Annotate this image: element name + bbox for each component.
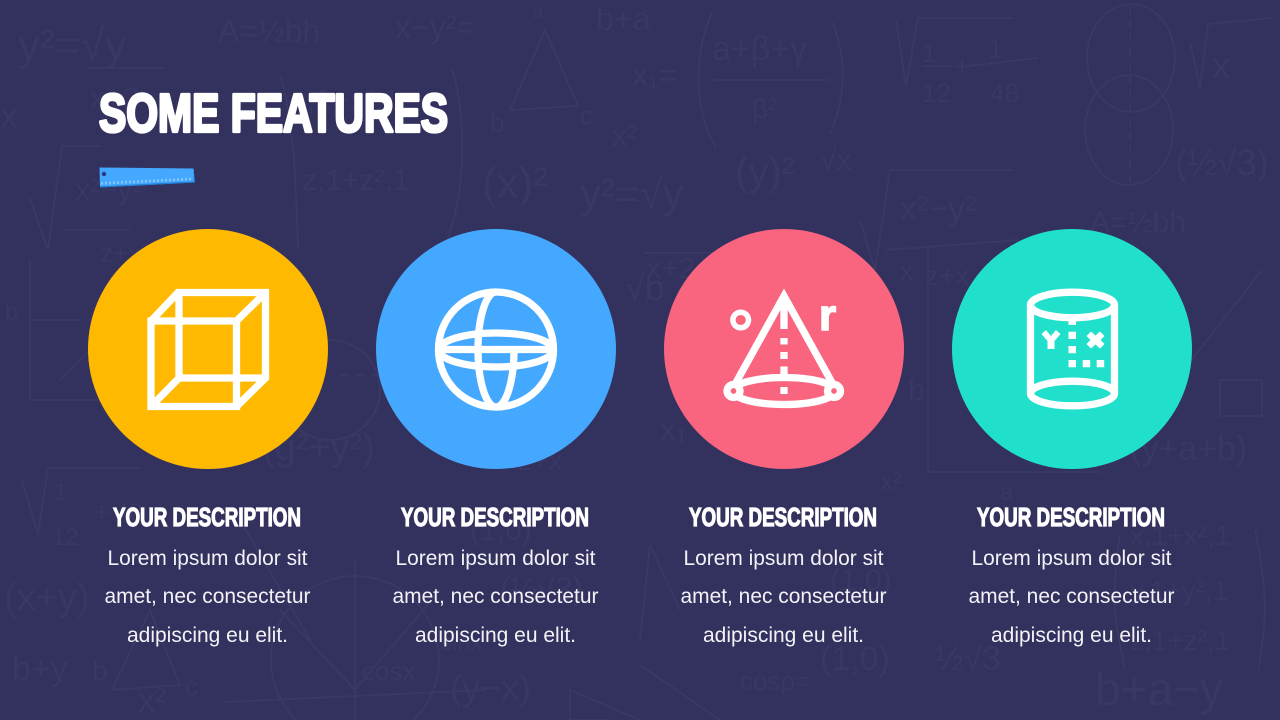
background pattern: math formulas: (x)²	[482, 159, 548, 208]
background pattern: math formulas: sinx	[440, 629, 483, 656]
background pattern: math formulas: b	[490, 108, 504, 138]
background pattern: math formulas: b+y	[12, 650, 68, 688]
faint geometry mid band	[30, 260, 180, 400]
background pattern: math formulas: y²=√y	[580, 170, 684, 217]
background pattern: math formulas: c	[580, 100, 593, 130]
background pattern: math formulas: c	[185, 671, 198, 701]
background pattern: math formulas: a+β+γ	[712, 30, 807, 68]
background pattern: math formulas: 1	[54, 479, 67, 506]
background pattern: math formulas: z,1+z²,1	[1130, 625, 1230, 656]
background pattern: math formulas: b	[92, 655, 108, 686]
description: amet, nec consectetur	[392, 585, 599, 608]
background pattern: math formulas: x+2	[90, 82, 139, 115]
background pattern: math formulas: b	[908, 374, 925, 407]
blue circle	[376, 229, 616, 469]
background pattern: math formulas: β²	[752, 93, 777, 124]
description: adipiscing eu elit.	[703, 624, 864, 647]
background pattern: math formulas: a	[532, 1, 544, 23]
background pattern: math formulas: cosρ=	[740, 666, 810, 696]
background pattern: math formulas: A=½bh	[1090, 206, 1186, 239]
background pattern: math formulas: 12	[922, 78, 951, 108]
background pattern: math formulas: (y−x)	[450, 667, 531, 708]
background pattern: math formulas: (1,0)	[820, 640, 890, 678]
description: adipiscing eu elit.	[991, 624, 1152, 647]
description: Lorem ipsum dolor sit	[396, 547, 596, 570]
description: Lorem ipsum dolor sit	[108, 547, 308, 570]
background pattern: math formulas: b+a−y	[1095, 663, 1223, 715]
heading: YOUR DESCRIPTION	[977, 504, 1165, 532]
ruler icon	[100, 168, 195, 188]
description	[968, 547, 1175, 647]
background pattern: math formulas: y²=√y	[18, 21, 126, 70]
background pattern: math formulas: z,1+z²,1	[302, 164, 410, 197]
description: amet, nec consectetur	[104, 585, 311, 608]
icon: cone: r	[819, 291, 836, 340]
background pattern: math formulas: y,1+y²,1	[1130, 575, 1228, 606]
background pattern: math formulas: 12	[52, 524, 79, 551]
background pattern: math formulas: (y+a+b)	[1130, 430, 1247, 468]
background pattern: math formulas: z+x	[925, 260, 969, 291]
background pattern: math formulas: (1,0)	[470, 514, 532, 547]
background pattern: math formulas: x	[0, 95, 18, 136]
background pattern: math formulas: (g²+y²)	[262, 427, 375, 469]
background pattern: math formulas: 48	[990, 78, 1019, 108]
background pattern: math formulas: +	[954, 51, 970, 82]
background pattern: math formulas: √b	[625, 267, 665, 308]
background pattern: math formulas: x₁	[660, 411, 687, 447]
background pattern: math formulas: √x	[820, 144, 851, 177]
teal circle	[952, 229, 1192, 469]
background pattern: math formulas: x²	[612, 120, 637, 153]
heading: YOUR DESCRIPTION	[113, 504, 301, 532]
description: Lorem ipsum dolor sit	[684, 547, 884, 570]
background pattern: math formulas: z+x	[100, 238, 141, 268]
background pattern: math formulas: cosx	[362, 656, 415, 686]
feature 3: cone	[664, 229, 904, 647]
background pattern: math formulas: x+2	[646, 252, 695, 285]
coral circle	[664, 229, 904, 469]
background pattern: math formulas: (½√3)	[500, 571, 583, 607]
description	[104, 547, 311, 647]
icon: cylinder	[1030, 292, 1114, 406]
description: amet, nec consectetur	[968, 585, 1175, 608]
background pattern: math formulas: b	[5, 299, 18, 326]
background pattern: math formulas: x−y²=	[395, 9, 475, 45]
background pattern: math formulas: x₁=	[632, 57, 677, 93]
background pattern: math formulas: a	[1000, 479, 1014, 506]
feature 2: sphere	[376, 229, 616, 647]
icon: wireframe cube	[151, 292, 266, 406]
icon: globe	[438, 292, 554, 407]
description: amet, nec consectetur	[680, 585, 887, 608]
background pattern: math formulas: x	[900, 256, 913, 286]
background pattern: math formulas: x²	[880, 466, 902, 496]
description	[680, 547, 887, 647]
background pattern: math formulas: (x+y)	[4, 577, 90, 619]
description: adipiscing eu elit.	[127, 624, 288, 647]
background pattern: math formulas: 1	[922, 38, 936, 68]
background pattern: math formulas: x²−y²	[900, 190, 976, 228]
description	[392, 547, 599, 647]
background pattern: math formulas: A=½bh	[218, 13, 320, 49]
description: adipiscing eu elit.	[415, 624, 576, 647]
background pattern: math formulas: x²	[138, 682, 166, 720]
heading: YOUR DESCRIPTION	[689, 504, 877, 532]
background pattern: math formulas: x²−y²	[75, 174, 143, 207]
icon: cone	[727, 291, 840, 404]
background pattern: math formulas: 1	[988, 34, 1002, 64]
background pattern: math formulas: (1,0)	[830, 564, 892, 597]
title: SOME FEATURES	[99, 84, 448, 144]
background pattern: math formulas: b+a	[596, 1, 650, 37]
background pattern: math formulas: ½√3	[935, 640, 1001, 678]
feature 1: cube	[88, 229, 328, 647]
yellow circle	[88, 229, 328, 469]
background pattern: math formulas: + 48	[95, 499, 142, 526]
background pattern: math formulas: x−y	[800, 241, 838, 268]
background pattern: math formulas: z+x	[518, 445, 562, 476]
feature 4: cylinder	[952, 229, 1192, 647]
background pattern: math formulas: (y)²	[735, 150, 795, 194]
heading: YOUR DESCRIPTION	[401, 504, 589, 532]
background pattern: math formulas: x,1+x²,1	[1130, 520, 1230, 551]
description: Lorem ipsum dolor sit	[972, 547, 1172, 570]
background pattern: math formulas: (½√3)	[1175, 142, 1269, 183]
background pattern: math formulas: x,1+x²,1	[292, 84, 400, 117]
background pattern: math formulas: x	[1212, 45, 1230, 86]
